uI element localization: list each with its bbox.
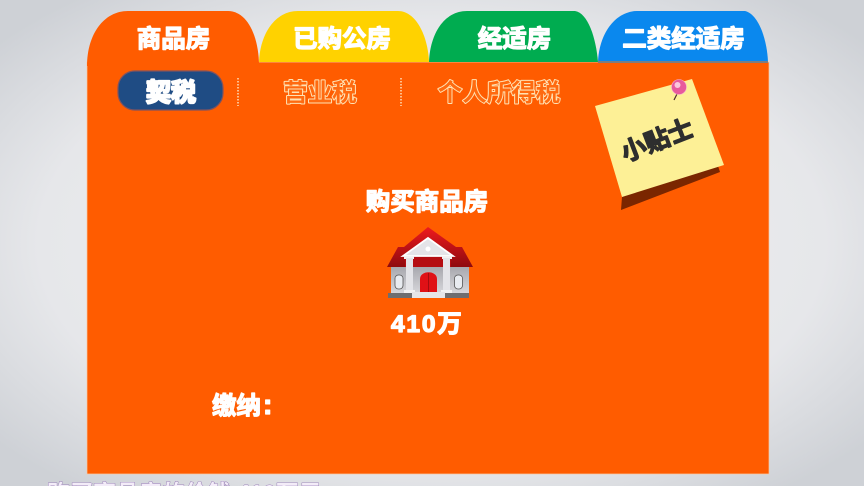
tab: 二类经适房 bbox=[598, 11, 768, 63]
sub tab: 契税 selected pill: 契税 bbox=[146, 79, 196, 107]
tab: 二类经适房: 二类经适房 bbox=[622, 25, 745, 53]
icon: house bbox=[387, 227, 473, 298]
tab: 商品房 bbox=[87, 11, 259, 66]
tab: 商品房: 商品房 bbox=[137, 25, 210, 53]
tab: 已购公房: 已购公房 bbox=[293, 25, 391, 53]
label: 缴纳: 缴纳: bbox=[212, 389, 272, 420]
sub tab: 契税 selected pill bbox=[118, 71, 223, 110]
label: 410万: 410万 bbox=[391, 311, 464, 338]
heading: 购买商品房: 购买商品房 bbox=[366, 188, 488, 216]
icon: push pin bbox=[672, 80, 686, 100]
divider: first dotted bbox=[237, 78, 239, 106]
tab: 已购公房 bbox=[259, 11, 429, 62]
panel: main orange panel bbox=[87, 62, 769, 474]
sub tab: 营业税: 营业税 bbox=[283, 79, 357, 107]
sub tab: 个人所得税: 个人所得税 bbox=[438, 79, 560, 107]
tab: 经适房 bbox=[429, 11, 598, 62]
sticky note: 小贴士 bbox=[595, 79, 724, 210]
divider: second dotted bbox=[400, 78, 402, 106]
sticky note: 小贴士: 小贴士 bbox=[617, 114, 697, 167]
tab: 经适房: 经适房 bbox=[478, 25, 551, 53]
